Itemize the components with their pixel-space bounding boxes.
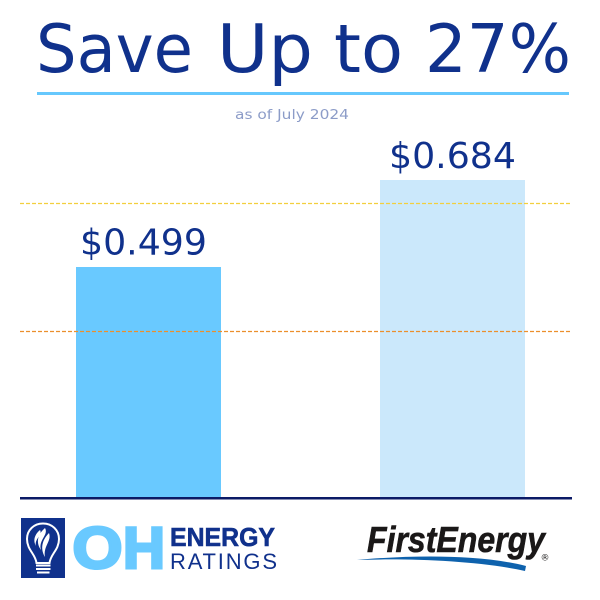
value label: OH Energy Ratings: $0.499 xyxy=(80,222,207,264)
logo wordmark: OH: O xyxy=(72,516,122,581)
logo: OH Energy Ratings xyxy=(21,516,277,581)
title: Save xyxy=(36,10,193,88)
logo wordmark: ENERGY: ENERGY xyxy=(170,522,275,552)
bar chart xyxy=(20,136,572,500)
title underline xyxy=(37,92,569,95)
bar: OH Energy Ratings xyxy=(76,267,221,497)
icon: light bulb with flame xyxy=(21,518,65,578)
logo swoosh xyxy=(357,556,526,571)
value label: FirstEnergy: $0.684 xyxy=(389,136,516,177)
title: 27% xyxy=(425,10,571,88)
title: to xyxy=(334,10,403,88)
bar: FirstEnergy xyxy=(380,180,525,497)
logo: FirstEnergy xyxy=(357,519,550,571)
reference line: upper xyxy=(20,202,570,204)
axis line xyxy=(20,497,572,500)
registered mark: ® xyxy=(540,554,550,564)
reference line: lower xyxy=(20,330,570,332)
subtitle: as of July 2024 xyxy=(235,108,349,123)
logo wordmark: FirstEnergy: FirstEnergy xyxy=(367,519,547,560)
logo wordmark: OH xyxy=(72,516,165,581)
logo wordmark: RATINGS: RATINGS xyxy=(170,549,277,574)
title xyxy=(36,10,571,88)
logo wordmark: OH: H xyxy=(123,516,165,581)
title: Up xyxy=(217,10,313,88)
